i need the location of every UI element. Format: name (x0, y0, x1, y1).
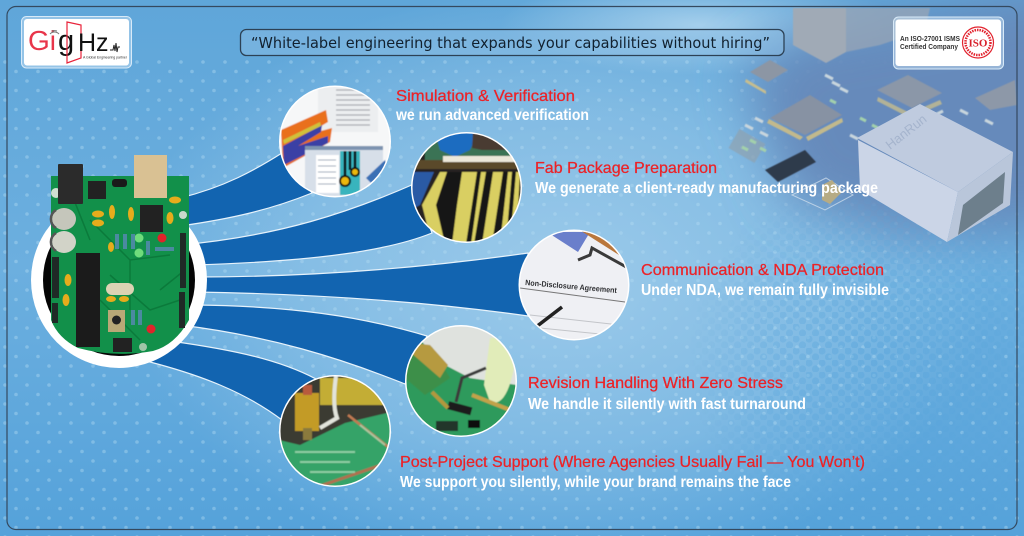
logo: GigHz: Hz (78, 29, 109, 57)
label: Post-Project Support (400, 454, 865, 491)
faded PCB photo background (728, 0, 1024, 482)
label: Fab Package Preparation: We generate a client-ready manufacturing package (535, 180, 878, 197)
label: Communication & NDA Protection: Communication & NDA Protection (641, 262, 884, 279)
label: Post-Project Support: We support you silently, while your brand remains the face (400, 474, 791, 491)
logo: GigHz: Gi (28, 25, 56, 56)
ISO badge: Certified Company (900, 42, 958, 51)
ribbons connecting board to circles (150, 153, 528, 420)
header pins (52, 257, 59, 298)
label: Post-Project Support: Post-Project Support (Where Agencies Usually Fail — You Won’t) (400, 454, 865, 471)
ISO badge: An ISO-27001 ISMS (900, 34, 960, 43)
label: Simulation & Verification: we run advanced verification (395, 107, 589, 124)
capacitors (52, 208, 76, 230)
label: Fab Package Preparation (535, 160, 878, 197)
photo circle 4: rework (405, 325, 517, 437)
central circle: white ring (31, 192, 207, 368)
USB port (134, 155, 167, 198)
ribbon 5 (150, 341, 316, 420)
photo circle 2: fab package (411, 132, 525, 244)
label: Revision Handling (528, 375, 806, 413)
logo: GigHz: A Global Engineering partner (83, 56, 128, 60)
logo: GigHz (22, 16, 132, 68)
PCB chips (729, 8, 1017, 182)
ribbon 2 (180, 184, 432, 265)
logo: GigHz: g (58, 25, 74, 57)
ISO badge: ISO (969, 38, 988, 50)
microcontroller (76, 253, 100, 347)
label: Fab Package Preparation: Fab Package Preparation (535, 160, 717, 177)
label: Communication & NDA Protection (641, 262, 889, 299)
label: Communication & NDA Protection: Under NDA, we remain fully invisible (641, 282, 889, 299)
photo circle 3: NDA document: Non-Disclosure Agreement (525, 278, 618, 295)
ribbon 4 (180, 305, 427, 384)
LEDs (134, 234, 144, 242)
ISO badge (894, 17, 1004, 69)
yellow capacitors (62, 196, 181, 306)
resistors (115, 234, 174, 325)
regulator and chips (88, 181, 106, 199)
RJ45 connector: HanRun (883, 111, 929, 152)
photo circle 5: pcb machine (279, 375, 392, 487)
ribbon 3 (195, 253, 528, 316)
RJ45 connector (857, 104, 1013, 242)
label: Revision Handling: We handle it silently with fast turnaround (528, 396, 806, 413)
quote banner (240, 30, 784, 56)
power jack (58, 164, 83, 204)
label: Revision Handling: Revision Handling With Zero Stress (528, 375, 783, 392)
label: Simulation & Verification (395, 88, 589, 124)
traces (51, 188, 187, 351)
ribbon 1 (180, 153, 312, 226)
push button (108, 310, 125, 332)
photo circle 3: NDA document (518, 229, 630, 341)
crystal (106, 283, 134, 295)
label: Simulation & Verification: Simulation & Verification (396, 88, 575, 105)
quote banner: “White-label engineering that expands your capabilities without hiring” (251, 34, 770, 52)
Arduino-style green circuit board (51, 155, 189, 354)
photo circle 1: simulation (279, 86, 391, 198)
